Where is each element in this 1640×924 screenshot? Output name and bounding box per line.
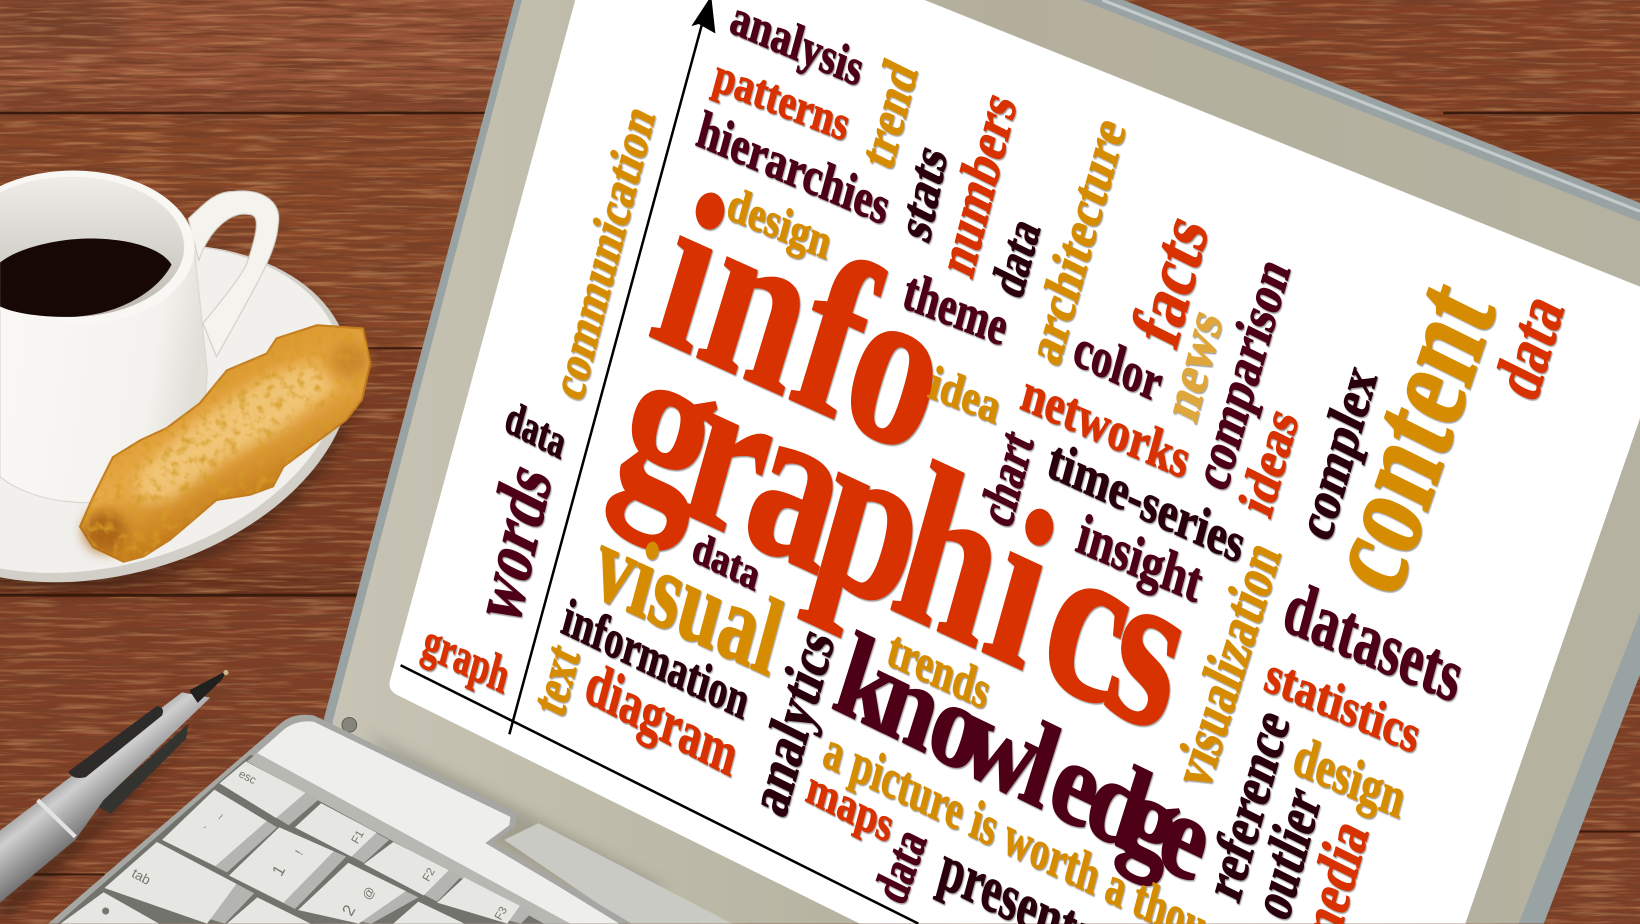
coffee cup	[0, 170, 279, 503]
word: knowledge: knowledge	[822, 608, 1227, 909]
word: data bottom: data	[863, 819, 937, 912]
word: information: information	[556, 587, 755, 731]
cup handle	[188, 191, 279, 357]
key: 1: !	[294, 849, 306, 857]
word: data left: data	[500, 390, 572, 469]
word: communication: communication	[541, 96, 665, 409]
key: tilde: ~	[215, 811, 228, 823]
key: F2: F2	[421, 866, 438, 884]
deck surface	[63, 721, 619, 924]
key well	[58, 755, 570, 924]
key: 2: @	[360, 884, 378, 902]
word: theme: theme	[897, 260, 1015, 357]
hinge bar	[504, 823, 732, 924]
key: tab	[105, 842, 254, 924]
word: info: info	[632, 142, 976, 504]
saucer	[0, 190, 397, 644]
coffee	[0, 238, 172, 317]
key: 1	[229, 827, 346, 909]
word: analytics: analytics	[738, 618, 846, 826]
y axis line with arrow	[509, 0, 715, 734]
sloped face above keys	[247, 753, 570, 924]
word: hierarchies: hierarchies	[691, 100, 896, 237]
pen clip	[96, 724, 188, 814]
word: datasets: datasets	[1276, 565, 1472, 719]
word: reference: reference	[1194, 700, 1302, 911]
pen ring	[38, 800, 75, 837]
word: visualization: visualization	[1161, 531, 1293, 798]
word: graph: graph	[418, 611, 516, 705]
key: 3	[393, 902, 464, 924]
deck edge	[48, 715, 632, 924]
key: 2	[298, 863, 418, 924]
word: words: words	[459, 450, 567, 635]
keyboard deck	[48, 715, 732, 924]
word: time-series: time-series	[1042, 428, 1252, 575]
word: numbers: numbers	[928, 82, 1028, 286]
word: insight: insight	[1071, 503, 1209, 615]
word cloud	[418, 0, 1578, 924]
word: data centre: data	[688, 522, 765, 601]
word: news: news	[1152, 299, 1233, 430]
word: complex: complex	[1286, 356, 1388, 549]
word: trend: trend	[850, 51, 928, 178]
key: esc	[220, 761, 318, 825]
laptop lid: rim highlight	[1102, 0, 1640, 211]
hinge screw	[342, 718, 357, 732]
lower bezel shade	[366, 732, 669, 900]
word: text: text	[521, 634, 591, 725]
key: F3: F3	[493, 905, 510, 923]
cup rim	[0, 170, 195, 325]
word: facts: facts	[1117, 201, 1223, 359]
word: statistics: statistics	[1259, 645, 1426, 765]
word: idea: idea	[924, 356, 1007, 434]
pen	[0, 670, 229, 924]
word: ideas: ideas	[1229, 399, 1309, 525]
word: stats: stats	[888, 135, 958, 250]
key: q	[227, 897, 311, 924]
cup interior	[0, 177, 184, 317]
word: networks: networks	[1016, 362, 1197, 490]
word: data right: data	[1480, 281, 1578, 411]
key: F3	[437, 878, 532, 924]
word: diagram: diagram	[579, 649, 745, 790]
key: esc: esc	[236, 768, 258, 787]
pastry	[80, 325, 370, 562]
cup body	[0, 248, 207, 503]
word: comparison: comparison	[1183, 248, 1301, 499]
key: tab: tab	[129, 866, 153, 888]
word: design top: design	[722, 177, 837, 270]
key: F1	[295, 803, 389, 863]
word: content: content	[1297, 259, 1521, 614]
x axis line	[401, 665, 918, 924]
key: F1: F1	[350, 829, 367, 846]
word: architecture: architecture	[1017, 108, 1137, 374]
pen tip	[189, 670, 227, 703]
laptop screen	[389, 0, 1640, 924]
word: trends: trends	[882, 619, 996, 721]
key: caps lock	[61, 892, 159, 924]
key: tilde: `	[203, 825, 215, 835]
word: color: color	[1068, 317, 1169, 414]
word: maps: maps	[801, 760, 899, 853]
word: graphics: graphics	[597, 287, 1216, 781]
word: chart: chart	[969, 420, 1045, 536]
word: visual: visual	[583, 502, 794, 700]
chart axes	[401, 0, 918, 924]
pen grip	[68, 706, 163, 778]
word: outlier: outlier	[1241, 776, 1333, 924]
key: 1: 1	[268, 862, 289, 879]
word: data upper: data	[981, 208, 1050, 306]
key: 2: 2	[338, 902, 359, 919]
key: tilde	[162, 790, 277, 872]
word: design right: design	[1287, 725, 1412, 831]
pen barrel	[0, 692, 210, 903]
key: F2	[364, 842, 461, 902]
word: patterns: patterns	[708, 48, 856, 152]
